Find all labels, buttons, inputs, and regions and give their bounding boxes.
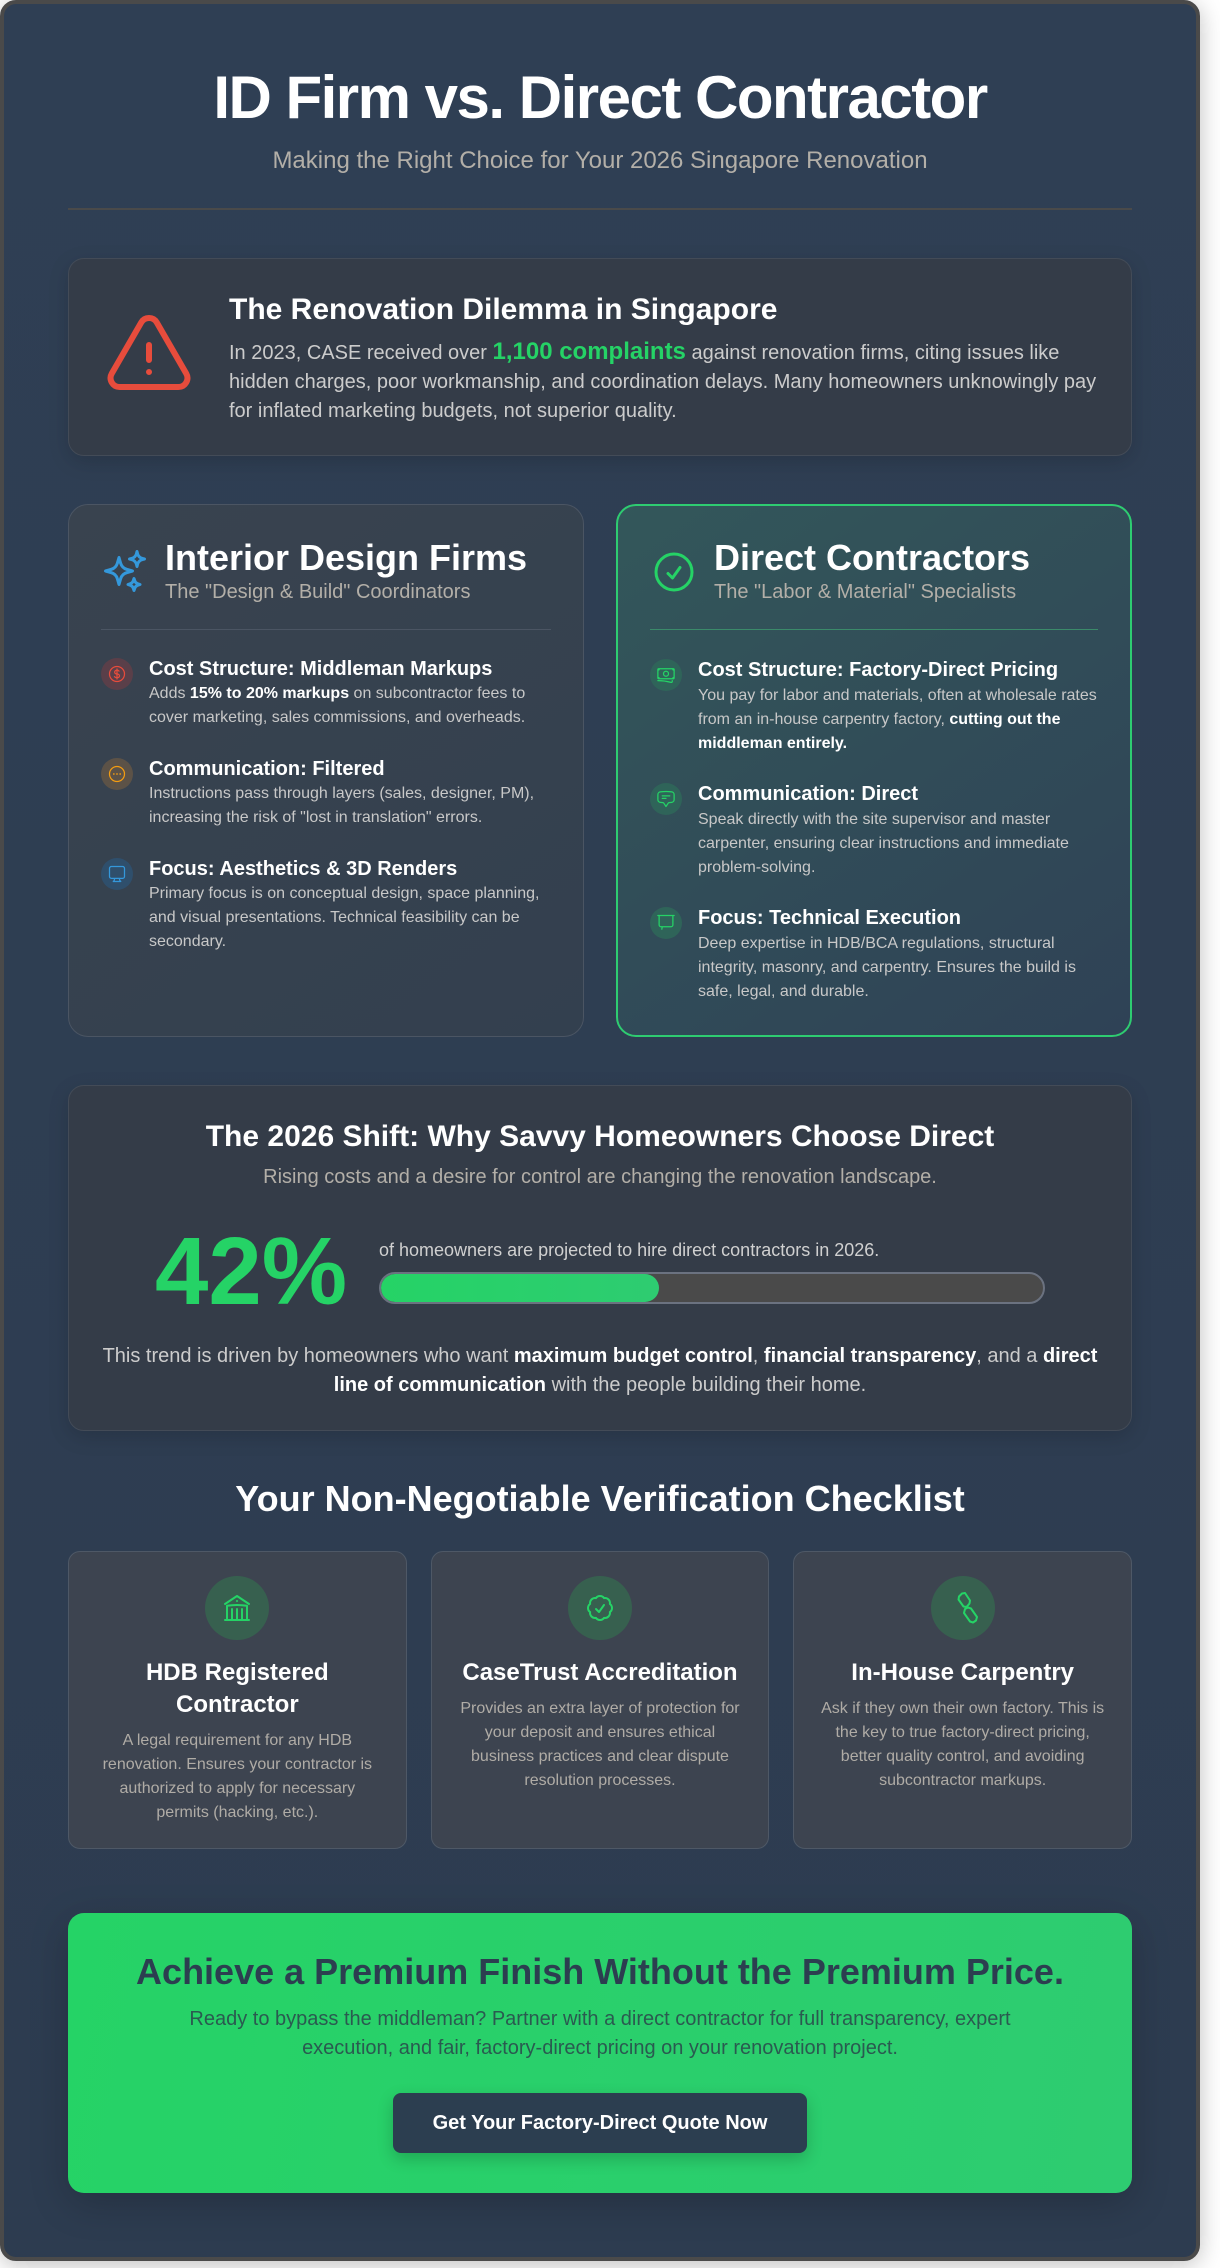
cta text: execution, and fair, factory-direct pricing on your renovation project. xyxy=(302,2037,898,2059)
subtitle: Making the Right Choice for Your 2026 Singapore Renovation xyxy=(272,147,928,174)
item: cost structure xyxy=(650,659,1097,752)
panel: direct contractors xyxy=(616,504,1132,1037)
icon: banknotes xyxy=(650,659,682,691)
cta button: Get Your Factory-Direct Quote Now xyxy=(433,2112,767,2134)
checklist heading: Your Non-Negotiable Verification Checklist xyxy=(235,1478,965,1519)
panel: interior design firms xyxy=(68,504,584,1037)
column rule xyxy=(650,629,1098,630)
column heading: Interior Design Firms xyxy=(165,537,527,578)
item heading: Cost Structure: Factory-Direct Pricing xyxy=(698,659,1058,681)
item text: carpenter, ensuring clear instructions and immediate xyxy=(698,835,1069,852)
item text xyxy=(149,885,539,950)
card text: authorized to apply for necessary xyxy=(119,1780,355,1797)
icon: screen xyxy=(650,907,682,939)
shift conclusion xyxy=(103,1345,1098,1396)
icon: sparkles xyxy=(104,550,146,592)
cta text xyxy=(189,2008,1011,2059)
item text: problem-solving. xyxy=(698,859,815,876)
item text xyxy=(149,785,534,826)
item text: Primary focus is on conceptual design, space planning, xyxy=(149,885,539,902)
stat: 42%: 42% xyxy=(155,1218,347,1325)
card text: permits (hacking, etc.). xyxy=(156,1804,318,1821)
item heading: Cost Structure: Middleman Markups xyxy=(149,658,492,680)
column subtitle: The "Labor & Material" Specialists xyxy=(714,581,1016,603)
icon: check circle xyxy=(654,552,694,592)
card text: renovation. Ensures your contractor is xyxy=(103,1756,372,1773)
icon: chat bubble xyxy=(650,783,682,815)
card text: A legal requirement for any HDB xyxy=(123,1732,352,1749)
panel: call to action xyxy=(68,1913,1132,2193)
card heading: HDB Registered xyxy=(146,1659,329,1686)
item text: Speak directly with the site supervisor and master xyxy=(698,811,1050,828)
card text: the key to true factory-direct pricing, xyxy=(835,1724,1090,1741)
item text: safe, legal, and durable. xyxy=(698,983,869,1000)
card heading xyxy=(146,1659,329,1718)
dilemma heading: The Renovation Dilemma in Singapore xyxy=(229,293,777,326)
dilemma body text: hidden charges, poor workmanship, and coordination delays. Many homeowners unknowingly pay xyxy=(229,371,1096,393)
item text xyxy=(698,811,1069,876)
panel: renovation dilemma xyxy=(68,258,1132,456)
progress bar xyxy=(379,1272,1045,1304)
shift subtitle: Rising costs and a desire for control are changing the renovation landscape. xyxy=(263,1166,937,1188)
icon: warning triangle xyxy=(108,315,190,390)
icon: monitor xyxy=(101,858,133,890)
dilemma body text: In 2023, CASE received over 1,100 complaints against renovation firms, citing issues like xyxy=(229,338,1059,365)
item heading: Focus: Aesthetics & 3D Renders xyxy=(149,858,457,880)
item text: You pay for labor and materials, often at wholesale rates xyxy=(698,687,1097,704)
cta heading: Achieve a Premium Finish Without the Premium Price. xyxy=(136,1951,1064,1992)
shift heading: The 2026 Shift: Why Savvy Homeowners Choose Direct xyxy=(206,1120,994,1153)
card text: your deposit and ensures ethical xyxy=(485,1724,715,1741)
item: cost structure xyxy=(101,658,525,726)
progress fill xyxy=(381,1274,659,1302)
column rule xyxy=(101,629,551,630)
card text xyxy=(821,1700,1104,1789)
card text: subcontractor markups. xyxy=(879,1772,1046,1789)
title: ID Firm vs. Direct Contractor xyxy=(213,64,987,131)
shift conclusion: This trend is driven by homeowners who want maximum budget control, financial transparency, and a direct xyxy=(103,1345,1097,1367)
item: focus xyxy=(101,858,539,950)
item text: Adds 15% to 20% markups on subcontractor fees to xyxy=(149,685,525,702)
item heading: Communication: Filtered xyxy=(149,758,385,780)
card text xyxy=(103,1732,372,1821)
item heading: Communication: Direct xyxy=(698,783,918,805)
card text: Ask if they own their own factory. This is xyxy=(821,1700,1104,1717)
card: hdb registered xyxy=(68,1551,407,1849)
item text xyxy=(149,685,525,726)
item: focus xyxy=(650,907,1076,1000)
cta text: Ready to bypass the middleman? Partner with a direct contractor for full transparency, expert xyxy=(189,2008,1011,2030)
icon: link xyxy=(931,1576,995,1640)
card: in-house carpentry xyxy=(793,1551,1132,1849)
stat caption: of homeowners are projected to hire direct contractors in 2026. xyxy=(379,1240,879,1260)
item text: middleman entirely. xyxy=(698,735,847,752)
item heading: Focus: Technical Execution xyxy=(698,907,961,929)
item text: integrity, masonry, and carpentry. Ensures the build is xyxy=(698,959,1076,976)
card text: better quality control, and avoiding xyxy=(841,1748,1085,1765)
card: casetrust xyxy=(431,1551,769,1849)
shift conclusion: line of communication with the people building their home. xyxy=(334,1374,866,1396)
card text: Provides an extra layer of protection for xyxy=(460,1700,740,1717)
dilemma body text xyxy=(229,338,1096,422)
dilemma body text: for inflated marketing budgets, not superior quality. xyxy=(229,400,677,422)
item text xyxy=(698,935,1076,1000)
item text: secondary. xyxy=(149,933,226,950)
header rule xyxy=(68,208,1132,210)
item text xyxy=(698,687,1097,752)
cta button xyxy=(393,2093,807,2153)
item text: and visual presentations. Technical feasibility can be xyxy=(149,909,520,926)
panel: the 2026 shift xyxy=(68,1085,1132,1431)
item: communication xyxy=(650,783,1069,876)
item text: Deep expertise in HDB/BCA regulations, structural xyxy=(698,935,1055,952)
card heading: CaseTrust Accreditation xyxy=(462,1659,738,1686)
card text xyxy=(460,1700,740,1789)
item text: from an in-house carpentry factory, cutting out the xyxy=(698,711,1060,728)
icon: dollar xyxy=(101,658,133,690)
card heading: Contractor xyxy=(176,1691,299,1718)
item text: cover marketing, sales commissions, and overheads. xyxy=(149,709,525,726)
icon: building xyxy=(205,1576,269,1640)
icon: badge xyxy=(568,1576,632,1640)
icon: ellipsis xyxy=(101,758,133,790)
item: communication xyxy=(101,758,534,826)
card text: business practices and clear dispute xyxy=(471,1748,729,1765)
item text: increasing the risk of "lost in translation" errors. xyxy=(149,809,482,826)
item text: Instructions pass through layers (sales, designer, PM), xyxy=(149,785,534,802)
column subtitle: The "Design & Build" Coordinators xyxy=(165,581,470,603)
card text: resolution processes. xyxy=(524,1772,676,1789)
column heading: Direct Contractors xyxy=(714,537,1030,578)
card heading: In-House Carpentry xyxy=(851,1659,1074,1686)
